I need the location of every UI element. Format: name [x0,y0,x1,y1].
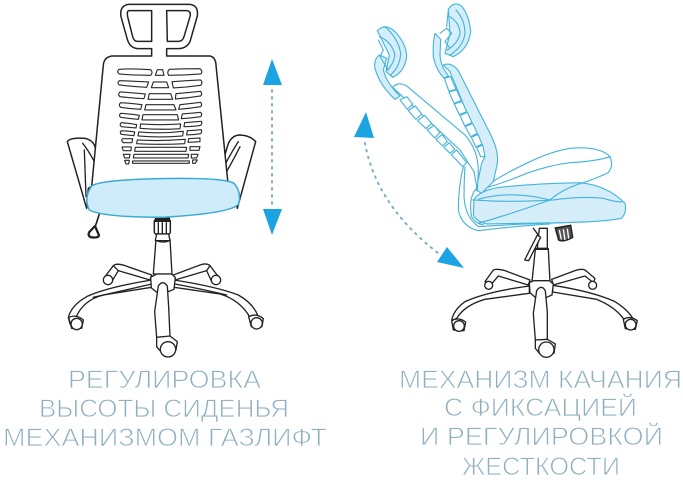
text block: right caption [399,366,682,480]
upright back band [443,64,498,193]
icon: tilt adjustment arrow [354,112,464,268]
text block: left caption [3,366,327,452]
upright seat [473,183,626,224]
text block: left caption: МЕХАНИЗМОМ ГАЗЛИФТ [3,424,327,452]
upright ladder [444,77,485,157]
text block: right caption: С ФИКСАЦИЕЙ [444,392,637,422]
reclined headrest pad [377,27,407,77]
upright headrest frame [433,33,449,78]
icon: chair base front [68,214,263,357]
back shell [458,167,550,231]
icon: chair base side [452,225,637,357]
seat [87,178,239,217]
icon: tilted blue chair [375,4,626,231]
upright headrest pad [445,4,471,57]
icon: chair back and headrest front [67,4,256,217]
reclined headrest frame [375,55,400,99]
panel: side view chair [375,4,637,357]
text block: left caption: ВЫСОТЫ СИДЕНЬЯ [39,395,289,423]
reclined ladder [400,97,467,167]
icon: height adjustment arrow [263,59,282,235]
panel: front view chair [67,4,263,357]
reclined seat outline [478,148,612,223]
reclined back band [393,84,478,190]
text block: right caption: И РЕГУЛИРОВКОЙ [420,421,663,451]
mesh slats [118,69,202,164]
text block: right caption: МЕХАНИЗМ КАЧАНИЯ [399,366,682,394]
text block: left caption: РЕГУЛИРОВКА [68,366,261,394]
